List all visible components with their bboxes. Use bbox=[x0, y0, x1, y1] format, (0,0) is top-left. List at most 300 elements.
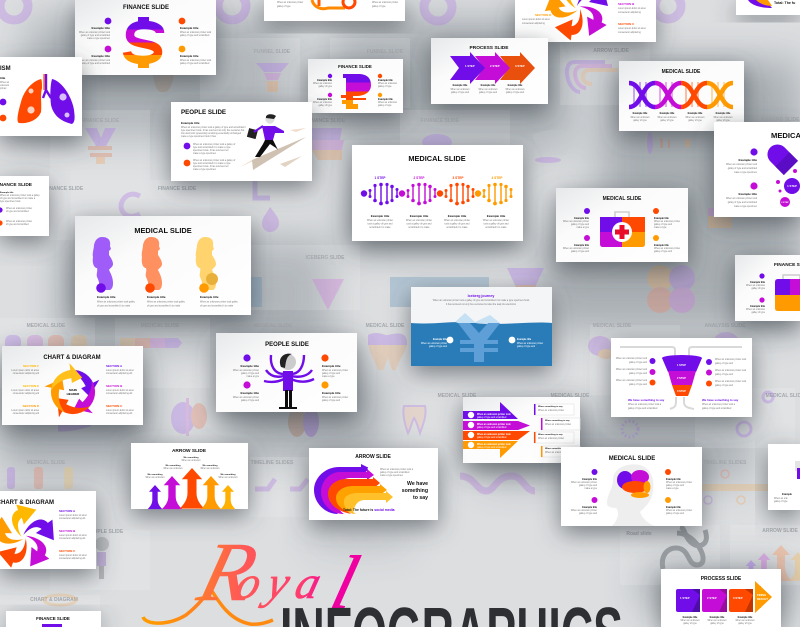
markers bbox=[0, 207, 3, 226]
pinwheel bbox=[541, 0, 608, 43]
ghost slide titles: PEOPLE SLIDE bbox=[87, 529, 124, 535]
text: When an unknown printer bbox=[322, 369, 348, 372]
logo: royal script bbox=[143, 526, 371, 625]
sections bbox=[522, 2, 646, 34]
text: Example title bbox=[453, 84, 468, 87]
text: Example title bbox=[317, 79, 333, 82]
text: of type and scrambled it to make bbox=[200, 304, 234, 308]
ghost: tooth lower bbox=[403, 406, 426, 433]
note bbox=[380, 468, 414, 477]
text: When an unknown bbox=[746, 309, 766, 311]
note cards: When something to say bbox=[538, 433, 563, 436]
panel: finance bottom slide bbox=[6, 611, 101, 627]
right sections: Lorem ipsum dolor sit amet bbox=[106, 369, 134, 372]
marker text: type and scrambled it to make a type bbox=[193, 146, 231, 149]
text: When an unknown bbox=[713, 117, 733, 119]
heading: FINANCE SLIDE bbox=[123, 5, 169, 11]
intro: When an unknown printer took a galley of type and scrambled it to make a type specimen book bbox=[433, 299, 530, 302]
text: Example title bbox=[750, 281, 766, 284]
main header: MAIN bbox=[69, 388, 77, 392]
heading: PEOPLE SLIDE bbox=[265, 342, 309, 348]
text: When an unknown bbox=[450, 89, 470, 91]
process blocks: 1 STEP bbox=[680, 596, 690, 600]
left text: When an unknown printer took bbox=[616, 379, 648, 382]
captions: When an unknown bbox=[200, 468, 220, 470]
text: make a type bbox=[322, 375, 335, 378]
text: Example title bbox=[574, 244, 590, 247]
total text: Total: The fu bbox=[774, 1, 795, 5]
heading: MEDICAL SLIDE bbox=[408, 154, 466, 163]
ghost slide titles: FUNNEL SLIDE bbox=[254, 49, 291, 55]
text: Example title bbox=[378, 79, 393, 82]
text: When an unknown bbox=[478, 89, 498, 91]
ghost: process bar bbox=[120, 338, 182, 348]
ghost slide titles: FINANCE SLIDE bbox=[307, 118, 346, 124]
text: When an unknown printer bbox=[233, 396, 259, 399]
text: Example title bbox=[322, 391, 341, 395]
sections: consectetur adipiscing bbox=[522, 22, 545, 25]
right text: When an unknown printer took bbox=[715, 358, 747, 361]
text blocks: galley of type and scrambled bbox=[180, 34, 210, 37]
rainbow arrows bbox=[314, 464, 393, 514]
text: When an unknown printer bbox=[517, 342, 543, 345]
sections: SECTION B bbox=[618, 2, 635, 6]
ghost: kidneys bbox=[171, 398, 207, 436]
businessman bbox=[247, 114, 284, 157]
marker text: make a type specimen bbox=[193, 168, 217, 171]
text: When an unknown bbox=[313, 83, 333, 85]
text: When an unknown printer bbox=[563, 220, 589, 223]
left sections: SECTION E bbox=[23, 384, 39, 388]
panel: finance briefcase slide bbox=[735, 255, 800, 321]
text blocks: When an unknown printer took bbox=[180, 31, 212, 34]
right text: When an unknown printer took bbox=[715, 369, 747, 372]
person bbox=[264, 354, 314, 409]
text: When an unknown printer bbox=[322, 396, 348, 399]
panel: finance small slide bbox=[0, 176, 49, 236]
columns: took a galley of type and bbox=[407, 222, 432, 226]
arrow labels: 3 STEP bbox=[515, 64, 525, 68]
ghost: brain lobes bbox=[288, 407, 319, 437]
arrow labels: 2 STEP bbox=[490, 64, 500, 68]
text: Example title bbox=[750, 305, 766, 308]
text: When an unk bbox=[774, 498, 788, 500]
dollar chart bbox=[127, 17, 160, 68]
band text: When an unknown printer took bbox=[477, 433, 511, 436]
note cards: When something to say bbox=[545, 419, 570, 422]
heading: MEDICAL SLIDE bbox=[609, 456, 655, 462]
text: When an unknown bbox=[735, 620, 755, 622]
text: Example title bbox=[574, 217, 590, 220]
band text: galley of type and scrambled bbox=[477, 426, 507, 429]
panel: chart and diagram pinwheel slide bbox=[0, 491, 96, 570]
intro text: Example title bbox=[181, 121, 200, 125]
step labels: 2 STEP bbox=[414, 176, 425, 180]
ghost slide titles: FINANCE SLIDE bbox=[421, 118, 460, 124]
note: galley of type and scrambled bbox=[380, 471, 410, 474]
ghost: head stack bbox=[312, 128, 344, 160]
text: galley of type and bbox=[654, 223, 673, 226]
text: galley of type bbox=[378, 104, 392, 107]
ghost slide titles: MEDICAL SLIDE bbox=[366, 323, 405, 329]
note: make a type specimen bbox=[380, 474, 404, 477]
captions: galley of type and scrambled bbox=[628, 407, 658, 410]
panel: right-edge slide bbox=[768, 444, 800, 510]
heading: Iceberg journey bbox=[468, 294, 494, 298]
ghost: teeth bbox=[5, 335, 87, 350]
text: galley of type and bbox=[571, 223, 590, 226]
ghost: finance bag bbox=[422, 134, 452, 150]
text: galley of type bbox=[633, 119, 647, 122]
captions: When an unknown bbox=[181, 460, 201, 462]
text: make a type bbox=[584, 487, 598, 490]
helix ribbons bbox=[629, 83, 733, 107]
text: Example title bbox=[716, 112, 731, 115]
text: galley of type and bbox=[666, 512, 685, 515]
ghost slide titles: ICEBERG SLIDE bbox=[761, 117, 800, 123]
rainbow corner bbox=[748, 0, 772, 8]
text: When an unknown printer bbox=[654, 220, 680, 223]
text: When an unknown printer took a galley bbox=[0, 194, 41, 197]
panel: finance S slide bbox=[75, 0, 216, 75]
text bbox=[233, 364, 348, 402]
right text: galley of type and bbox=[715, 362, 734, 365]
text: Example title bbox=[738, 158, 757, 162]
ghost slide titles: MEDICAL SLIDE bbox=[438, 393, 477, 399]
left sections: consectetur adipiscing elit bbox=[13, 392, 39, 395]
arrow labels: 1 STEP bbox=[465, 64, 475, 68]
text bbox=[680, 616, 755, 625]
markers bbox=[0, 99, 6, 121]
ghost slide titles: MEDICAL SLIDE bbox=[27, 460, 66, 466]
right sections: consectetur adipiscing elit bbox=[106, 412, 133, 415]
text bbox=[571, 478, 692, 515]
left sections: Lorem ipsum dolor sit amet bbox=[11, 409, 39, 412]
left text: galley of type and bbox=[629, 383, 648, 386]
text bbox=[726, 158, 758, 208]
heading: FINANCE SLIDE bbox=[36, 616, 70, 621]
text: Example title bbox=[200, 295, 219, 299]
text bbox=[277, 1, 398, 8]
captions bbox=[145, 456, 238, 479]
captions: We something bbox=[184, 456, 199, 459]
panel: growth arrows slide bbox=[131, 443, 248, 509]
panel: process slide bottom bbox=[661, 569, 781, 627]
heading: ARROW SLIDE bbox=[172, 448, 207, 454]
columns: When an unknown printer bbox=[444, 219, 470, 222]
intro text bbox=[181, 121, 246, 138]
right text: galley of type and bbox=[715, 384, 734, 387]
panel: DNA medical main slide bbox=[352, 145, 523, 241]
band text: When an unknown printer took bbox=[477, 423, 511, 426]
captions bbox=[628, 398, 739, 410]
logo: royal script: oya bbox=[231, 558, 335, 609]
columns: When an unknown printer bbox=[406, 219, 432, 222]
text: galley of type bbox=[710, 622, 724, 625]
panel: chart and diagram slide bbox=[2, 346, 143, 425]
pipes bbox=[620, 347, 742, 409]
ghost slide titles: FINANCE SLIDE bbox=[158, 186, 197, 192]
columns: scrambled it to make bbox=[485, 226, 507, 229]
note cards bbox=[534, 404, 580, 457]
left text: galley of type and bbox=[629, 361, 648, 364]
ghost slide titles: MEDICAL SLIDE bbox=[254, 323, 293, 329]
text: galley of type and bbox=[517, 345, 536, 348]
text: of type and scrambled bbox=[6, 210, 29, 213]
text: galley of type and bbox=[579, 484, 598, 487]
text: Example title bbox=[738, 192, 757, 196]
text bbox=[0, 191, 41, 226]
marker text: When an unknown printer took a galley of bbox=[193, 143, 236, 146]
process blocks: FINISH bbox=[757, 593, 766, 597]
right sections: SECTION A bbox=[106, 364, 123, 368]
text: When an unknown printer bbox=[571, 481, 597, 484]
ghost: iceberg funnels bbox=[312, 255, 344, 310]
markers bbox=[184, 143, 190, 166]
text: When an unknown bbox=[505, 89, 525, 91]
ghost slide titles: FINANCE SLIDE bbox=[81, 118, 120, 124]
text: When an unknown printer bbox=[666, 481, 692, 484]
text: galley of type and bbox=[654, 250, 673, 253]
text: Example title bbox=[378, 98, 393, 101]
columns: took a galley of type and bbox=[445, 222, 470, 226]
panel: top arrow slide bbox=[264, 0, 405, 21]
process blocks bbox=[676, 581, 772, 613]
heading: PEOPLE SLIDE bbox=[181, 109, 226, 116]
text: Example title bbox=[322, 364, 341, 368]
text: When an unknown printer bbox=[421, 342, 447, 345]
intro text: make a type specimen book It has bbox=[181, 135, 217, 138]
text blocks: make a type specimen bbox=[87, 37, 111, 40]
side statement: something bbox=[402, 488, 428, 494]
sections: consectetur adipiscing elit bbox=[59, 517, 86, 520]
main header: HEADER bbox=[67, 392, 80, 396]
text: make a type specimen bbox=[734, 171, 758, 174]
intro bbox=[433, 299, 530, 306]
side statement: We have bbox=[407, 481, 428, 487]
band text: galley of type and scrambled bbox=[477, 446, 507, 449]
ghost slide titles: CHART & DIAGRAM bbox=[30, 597, 78, 603]
captions: When an unknown printer took a bbox=[702, 403, 736, 406]
ghost: tooth bbox=[368, 333, 407, 370]
step labels bbox=[375, 176, 503, 180]
text bbox=[313, 79, 398, 107]
captions: When an unknown bbox=[145, 477, 165, 479]
sections: Lorem ipsum dolor sit amet bbox=[59, 554, 87, 557]
circular arrows bbox=[39, 360, 102, 425]
text: galley of type bbox=[318, 104, 333, 107]
text blocks: Example title bbox=[91, 54, 110, 58]
left sections: consectetur adipiscing elit bbox=[13, 372, 39, 375]
text: Example title bbox=[240, 391, 259, 395]
left sections: consectetur adipiscing elit bbox=[13, 412, 39, 415]
water bbox=[411, 322, 552, 366]
heading: MEDICAL SLIDE bbox=[662, 69, 701, 75]
panel: finance P slide bbox=[308, 59, 403, 113]
left text: When an unknown printer took bbox=[616, 368, 648, 371]
side statement: to say bbox=[413, 495, 428, 501]
columns: scrambled it to make bbox=[369, 226, 391, 229]
sections: Lorem ipsum dolor sit amet bbox=[59, 514, 87, 517]
note cards: When an unknown printer bbox=[538, 409, 564, 412]
text bbox=[746, 281, 766, 314]
columns: took a galley of type and bbox=[484, 222, 509, 226]
first aid kit bbox=[600, 212, 645, 247]
text: Example bbox=[782, 493, 793, 496]
markers bbox=[105, 18, 185, 52]
logo: royal script: l bbox=[323, 540, 367, 625]
text: galley of type bbox=[751, 287, 766, 290]
left sections: SECTION F bbox=[23, 364, 39, 368]
bottom total: Total: The future is social media bbox=[343, 508, 395, 512]
arrows bbox=[148, 468, 235, 509]
captions: We something bbox=[166, 464, 181, 467]
text: galley of type bbox=[318, 85, 333, 88]
sections: SECTION C bbox=[59, 549, 76, 553]
text: When an unknown bbox=[313, 102, 333, 104]
text: galley of type and bbox=[571, 250, 590, 253]
text: make a type bbox=[246, 375, 260, 378]
ghost: cauldron bbox=[532, 130, 576, 163]
text: galley of type bbox=[378, 85, 392, 88]
side statement bbox=[402, 481, 428, 501]
text: Example title bbox=[666, 478, 681, 481]
intro: It has survived not only five centuries but also the leap into electronic bbox=[446, 303, 517, 306]
ghost: yen bbox=[85, 128, 116, 164]
markers bbox=[96, 283, 209, 293]
ghost: pipe and drop bbox=[255, 180, 279, 232]
text: Example title bbox=[240, 364, 259, 368]
captions: We something bbox=[221, 473, 236, 476]
text: galley of type and bbox=[241, 372, 260, 375]
ghost: rainbow arrow bbox=[567, 62, 618, 92]
text: Example title bbox=[633, 112, 648, 115]
briefcase bbox=[775, 275, 800, 311]
ghost: women bbox=[7, 467, 73, 489]
captions: We something bbox=[203, 464, 218, 467]
pinwheel bbox=[0, 500, 57, 570]
text bbox=[563, 217, 680, 253]
funnel: 1 STEP bbox=[677, 363, 686, 367]
sections: SECTION C bbox=[618, 22, 635, 26]
text: printer bbox=[0, 87, 7, 90]
text bbox=[774, 493, 793, 503]
text: When an unknown printer bbox=[6, 220, 32, 223]
ghost slide titles: MEDICAL SLIDE bbox=[551, 393, 590, 399]
heading: MEDICAL SLIDE bbox=[134, 226, 192, 235]
text: galley of type bbox=[716, 119, 730, 122]
process blocks: 3 STEP bbox=[733, 596, 743, 600]
heading: FINANCE SLIDE bbox=[338, 64, 372, 69]
right sections: consectetur adipiscing elit bbox=[106, 372, 133, 375]
panel: people climbing slide bbox=[171, 102, 312, 181]
right sections: Lorem ipsum dolor sit amet bbox=[106, 409, 134, 412]
panel: funnel slide bbox=[611, 338, 752, 417]
band text: When an unknown printer took bbox=[477, 443, 511, 446]
text: galley of type bbox=[372, 5, 386, 8]
captions: When an unknown bbox=[218, 477, 238, 479]
ghost slide titles: MEDICAL SLIDE bbox=[141, 323, 180, 329]
panel: top-right slide bbox=[736, 0, 800, 15]
ghost slide titles: TIMELINE SLIDES bbox=[704, 460, 747, 466]
text blocks: galley of type and scrambled bbox=[81, 34, 111, 37]
columns: scrambled it to make bbox=[408, 226, 430, 229]
heading: FINANCE S bbox=[774, 262, 800, 268]
text: Example title bbox=[710, 616, 725, 619]
text: Example title bbox=[582, 506, 598, 509]
capsule bbox=[763, 140, 798, 175]
ghost slide titles: ARROW SLIDE bbox=[762, 528, 798, 534]
shape top bbox=[42, 624, 62, 627]
text: When an unknown bbox=[707, 620, 727, 622]
text blocks: When an unknown printer took bbox=[180, 59, 212, 62]
heading: PROCESS SLIDE bbox=[701, 576, 742, 582]
text: When an unknown printer bbox=[6, 207, 32, 210]
text: galley of type bbox=[688, 119, 702, 122]
text: galley of type bbox=[683, 622, 697, 625]
text blocks: Example title bbox=[180, 26, 199, 30]
sections: SECTION B bbox=[59, 529, 76, 533]
text: Example title bbox=[433, 338, 448, 341]
band text: When an unknown printer took bbox=[477, 413, 511, 416]
panel: capsule slide bbox=[714, 122, 800, 217]
right text bbox=[715, 358, 747, 387]
text: When an unknown printer bbox=[277, 1, 303, 4]
ghost: euro bbox=[121, 194, 140, 216]
marker text bbox=[193, 143, 236, 171]
text: When an unknown bbox=[657, 117, 677, 119]
note: When an unknown printer took a bbox=[380, 468, 414, 471]
text: galley of type and bbox=[579, 512, 598, 515]
text: galley of type and bbox=[451, 91, 470, 94]
text: When an unknown bbox=[746, 285, 766, 287]
ghost: chart top bbox=[44, 595, 76, 605]
panel: chart top bbox=[515, 0, 656, 43]
process blocks: 2 STEP bbox=[707, 596, 717, 600]
process blocks: RESULT bbox=[757, 597, 768, 601]
ghost: brain top bbox=[588, 336, 614, 359]
ghost: kid person bbox=[95, 537, 109, 579]
panel: arrow list slide bbox=[463, 397, 580, 463]
text: galley of type bbox=[277, 5, 291, 8]
panel: pregnancy slide bbox=[75, 216, 251, 315]
markers bbox=[328, 74, 382, 97]
text: galley of type and bbox=[479, 91, 498, 94]
text bbox=[0, 76, 10, 90]
text: make a type bbox=[666, 487, 679, 490]
text: Example title bbox=[688, 112, 703, 115]
text bbox=[630, 112, 733, 122]
ghost: ring diagrams top bbox=[0, 0, 681, 21]
text: When an unknown printer bbox=[372, 1, 398, 4]
text blocks: galley of type and scrambled bbox=[180, 62, 210, 65]
text: Example title bbox=[97, 295, 116, 299]
ghost slide titles: Road slide bbox=[626, 531, 652, 537]
text blocks: When an unknown printer took bbox=[79, 31, 111, 34]
ghost: timeline arrows bbox=[255, 479, 308, 489]
panel: people many arms slide bbox=[216, 333, 357, 412]
text: Example title bbox=[317, 98, 333, 101]
captions: When an unknown bbox=[163, 468, 183, 470]
text: of type and scrambled it to make a bbox=[0, 197, 36, 200]
markers bbox=[759, 273, 765, 303]
ghost: road bbox=[662, 527, 706, 569]
text: of type and scrambled it to make bbox=[97, 304, 131, 308]
text: When an unknown bbox=[680, 620, 700, 622]
right sections: Lorem ipsum dolor sit amet bbox=[106, 389, 134, 392]
text: When an unknown printer took bbox=[726, 163, 758, 166]
logo: royal script: R bbox=[189, 526, 266, 619]
